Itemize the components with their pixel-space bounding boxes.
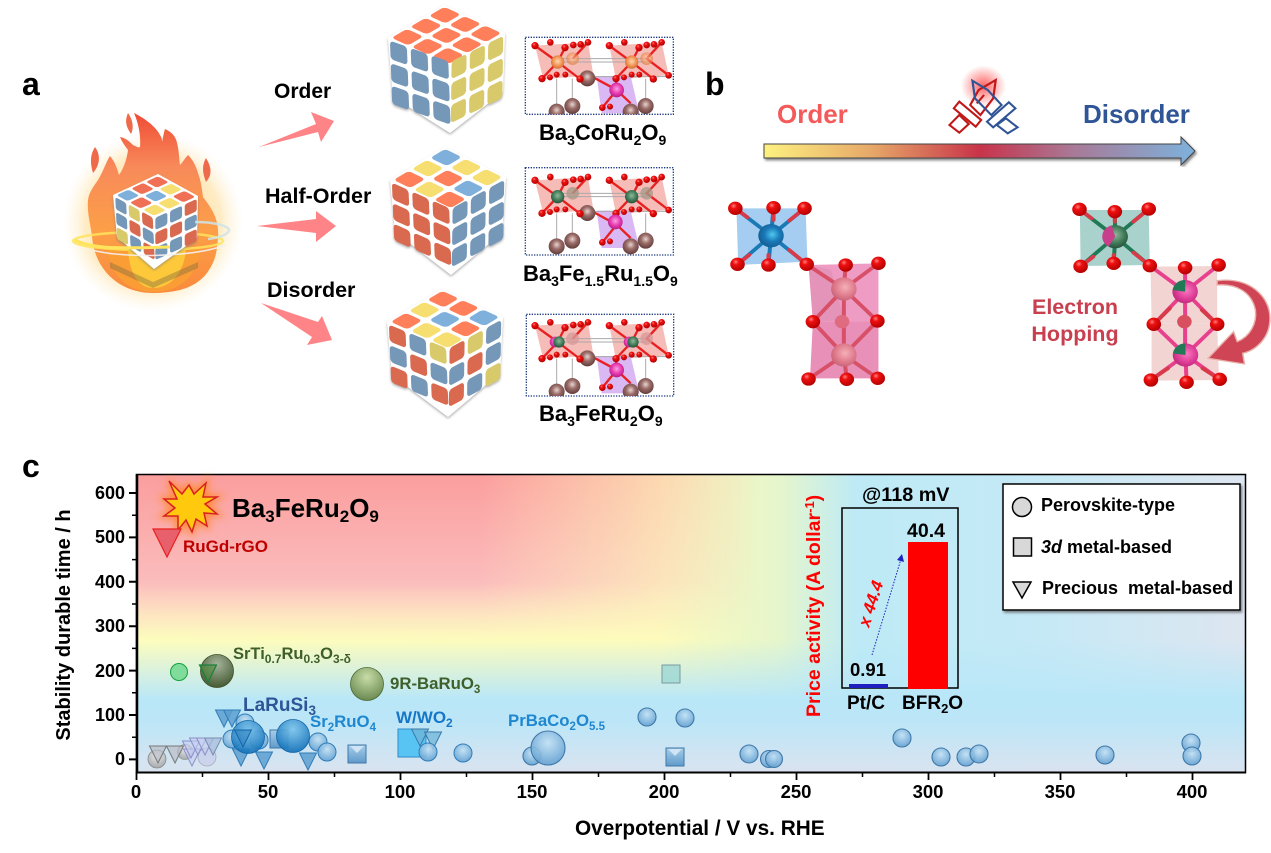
- inset y axis title: ): [803, 495, 825, 501]
- y axis tick labels: 600: [95, 483, 125, 503]
- arrow: electron hopping: [1208, 280, 1270, 364]
- label: Sr2RuO4: 2: [328, 722, 334, 734]
- formula: Ba3Fe1.5Ru1.5O9: Fe: [559, 261, 585, 286]
- icon: ordered cube: [388, 5, 505, 133]
- legend symbol: square: [1014, 538, 1032, 556]
- label: SrTi0.7Ru0.3O3-δ: SrTi: [233, 645, 265, 663]
- formula: Ba3CoRu2O9: O: [641, 120, 658, 145]
- structure: ordered octahedra: [728, 201, 886, 386]
- legend: [1003, 484, 1240, 610]
- category: Pt/C: Pt/C: [847, 693, 885, 714]
- formula: Ba3FeRu2O9: Ba: [539, 401, 567, 426]
- legend symbol: triangle: [1013, 582, 1031, 598]
- label: SrTi0.7Ru0.3O3-δ: O: [320, 645, 333, 663]
- legend text: Perovskite-type: Perovskite-type: [1041, 495, 1175, 515]
- marker: square near 200 mV: [662, 665, 680, 683]
- y axis tick labels: 100: [95, 705, 125, 725]
- legend text: 3d metal-based: 3d metal-based: [1041, 537, 1172, 557]
- plot background: [136, 475, 1245, 772]
- label: SrTi0.7Ru0.3O3-δ: Ru: [281, 645, 303, 663]
- label: Ba3FeRu2O9: O: [349, 493, 369, 523]
- heading: a: a: [22, 66, 40, 102]
- label: Sr2RuO4: RuO: [334, 712, 370, 731]
- category: BFR2O: 2: [941, 701, 948, 716]
- x axis tick labels: 350: [1045, 781, 1075, 802]
- category: BFR2O: BFR: [902, 693, 941, 714]
- crystal structure: Ba3FeRu2O9: [526, 314, 674, 400]
- x axis tick labels: 50: [258, 781, 278, 802]
- value: 0.91: 0.91: [850, 659, 886, 680]
- formula: Ba3Fe1.5Ru1.5O9: 1.5: [633, 273, 653, 289]
- arrow: fold increase: [872, 554, 904, 655]
- label: 9R-BaRuO3: 9R-BaRuO: [390, 674, 474, 693]
- label: Ba3FeRu2O9: Ba: [232, 493, 265, 523]
- x axis tick labels: 100: [385, 781, 415, 802]
- icon: burst star: [164, 481, 217, 532]
- crystal structure: Ba3CoRu2O9: [525, 37, 673, 120]
- icon: crossed swords: [949, 65, 1018, 133]
- heading: b: b: [705, 66, 725, 102]
- y axis title: Stability durable time / h: [53, 509, 75, 741]
- label: Disorder: Disorder: [267, 278, 356, 302]
- label: Ba3FeRu2O9: 2: [340, 507, 349, 526]
- y axis tick labels: 400: [95, 572, 125, 592]
- markers: grey and lilac low-overpotential points: [148, 738, 222, 768]
- heading: c: c: [22, 448, 40, 484]
- y axis tick labels: 500: [95, 527, 125, 547]
- formula: Ba3FeRu2O9: FeRu: [575, 401, 630, 426]
- inset y axis title: -1: [802, 501, 817, 513]
- y axis tick labels: 200: [95, 661, 125, 681]
- icon: half-ordered cube: [390, 147, 506, 275]
- formula: Ba3FeRu2O9: 9: [655, 413, 663, 429]
- label: 9R-BaRuO3: 3: [474, 684, 480, 696]
- x axis title: Overpotential / V vs. RHE: [575, 817, 825, 840]
- label: W/WO2: W/WO: [396, 708, 446, 727]
- formula: Ba3Fe1.5Ru1.5O9: Ba: [523, 261, 551, 286]
- label: Disorder: Disorder: [1083, 99, 1190, 129]
- label: RuGd-rGO: RuGd-rGO: [183, 537, 268, 556]
- label: Ba3FeRu2O9: 3: [265, 507, 275, 526]
- category: BFR2O: O: [948, 693, 963, 714]
- arrow: to half-ordered cube: [257, 211, 336, 242]
- formula: Ba3FeRu2O9: 2: [630, 413, 638, 429]
- inset: price activity bar chart: [802, 484, 963, 717]
- inset y axis title: Price activity (A dollar: [803, 513, 825, 717]
- label: Order: Order: [274, 80, 331, 103]
- icon: small cube: [113, 174, 198, 269]
- formula: Ba3FeRu2O9: O: [638, 401, 655, 426]
- panel b: order to disorder scale and structures: [705, 65, 1270, 389]
- x axis tick labels: 200: [649, 781, 679, 802]
- label: SrTi0.7Ru0.3O3-δ: 0.7: [265, 652, 282, 666]
- formula: Ba3CoRu2O9: 2: [634, 132, 642, 148]
- marker: RuGd-rGO triangle: [153, 529, 181, 557]
- label: SrTi0.7Ru0.3O3-δ: 3-δ: [333, 652, 351, 666]
- legend text: Precious metal-based: Precious metal-based: [1042, 578, 1233, 598]
- panel a: synthesis to ordered and disordered cubes: [22, 5, 678, 429]
- label: PrBaCo2O5.5: PrBaCo: [508, 711, 570, 730]
- label: PrBaCo2O5.5: 2: [570, 721, 576, 733]
- x axis tick labels: 400: [1177, 781, 1207, 802]
- arrow: to disordered cube: [261, 303, 332, 345]
- x axis tick labels: 150: [517, 781, 547, 802]
- formula: Ba3CoRu2O9: CoRu: [575, 120, 634, 145]
- label: Half-Order: Half-Order: [265, 184, 372, 208]
- markers: blue high-overpotential points: [523, 708, 1201, 768]
- label: PrBaCo2O5.5: O: [576, 711, 589, 730]
- markers: green high-stability points: [170, 654, 384, 700]
- label: LaRuSi3: 3: [308, 703, 316, 718]
- arrow: to ordered cube: [259, 112, 334, 147]
- bar: Pt/C: [849, 684, 888, 688]
- icon: rubik cube in flame: [63, 113, 243, 312]
- structure: disordered octahedra: [1072, 202, 1227, 389]
- inset frame: [842, 508, 958, 688]
- label: Ba3FeRu2O9: 9: [369, 507, 379, 526]
- bar: BFR2O: [908, 542, 948, 689]
- label: Ba3FeRu2O9: FeRu: [275, 493, 340, 523]
- formula: Ba3CoRu2O9: Ba: [539, 120, 567, 145]
- y axis tick labels: 0: [115, 749, 125, 769]
- marker: square at 203 mV: [666, 748, 684, 766]
- label: W/WO2: 2: [446, 716, 453, 730]
- markers: blue clustered points: [216, 710, 472, 770]
- label: PrBaCo2O5.5: 5.5: [589, 721, 606, 733]
- value: 40.4: 40.4: [907, 520, 945, 542]
- formula: Ba3Fe1.5Ru1.5O9: 3: [551, 273, 559, 289]
- label: Electron Hopping: Hopping: [1031, 322, 1119, 346]
- label: x 44.4: x 44.4: [854, 578, 888, 630]
- label: LaRuSi3: LaRuSi: [243, 695, 308, 716]
- label: SrTi0.7Ru0.3O3-δ: 0.3: [303, 652, 320, 666]
- crystal structure: Ba3Fe1.5Ru1.5O9: [525, 168, 673, 255]
- formula: Ba3Fe1.5Ru1.5O9: 1.5: [585, 273, 604, 289]
- x axis tick labels: 0: [131, 781, 141, 802]
- panel c: stability versus overpotential chart: [22, 448, 1246, 840]
- formula: Ba3CoRu2O9: 3: [567, 132, 575, 148]
- formula: Ba3FeRu2O9: 3: [567, 413, 575, 429]
- formula: Ba3Fe1.5Ru1.5O9: Ru: [604, 261, 633, 286]
- y axis tick labels: [95, 483, 125, 769]
- formula: Ba3Fe1.5Ru1.5O9: O: [653, 261, 670, 286]
- arrow: order to disorder gradient: [764, 137, 1195, 165]
- formula: Ba3CoRu2O9: 9: [658, 132, 666, 148]
- label: Order: Order: [777, 99, 848, 129]
- x axis tick labels: 250: [781, 781, 811, 802]
- legend symbol: circle: [1012, 498, 1032, 516]
- label: Electron Hopping: Electron: [1032, 295, 1118, 319]
- y axis tick labels: 300: [95, 616, 125, 636]
- axes and ticks: [129, 474, 1246, 780]
- label: Sr2RuO4: 4: [370, 722, 377, 734]
- inset title: @118 mV: [862, 484, 950, 506]
- x axis tick labels: 300: [913, 781, 943, 802]
- x axis tick labels: [131, 781, 1207, 802]
- icon: disordered cube: [387, 289, 503, 417]
- formula: Ba3Fe1.5Ru1.5O9: 9: [670, 273, 678, 289]
- label: Sr2RuO4: Sr: [310, 712, 328, 731]
